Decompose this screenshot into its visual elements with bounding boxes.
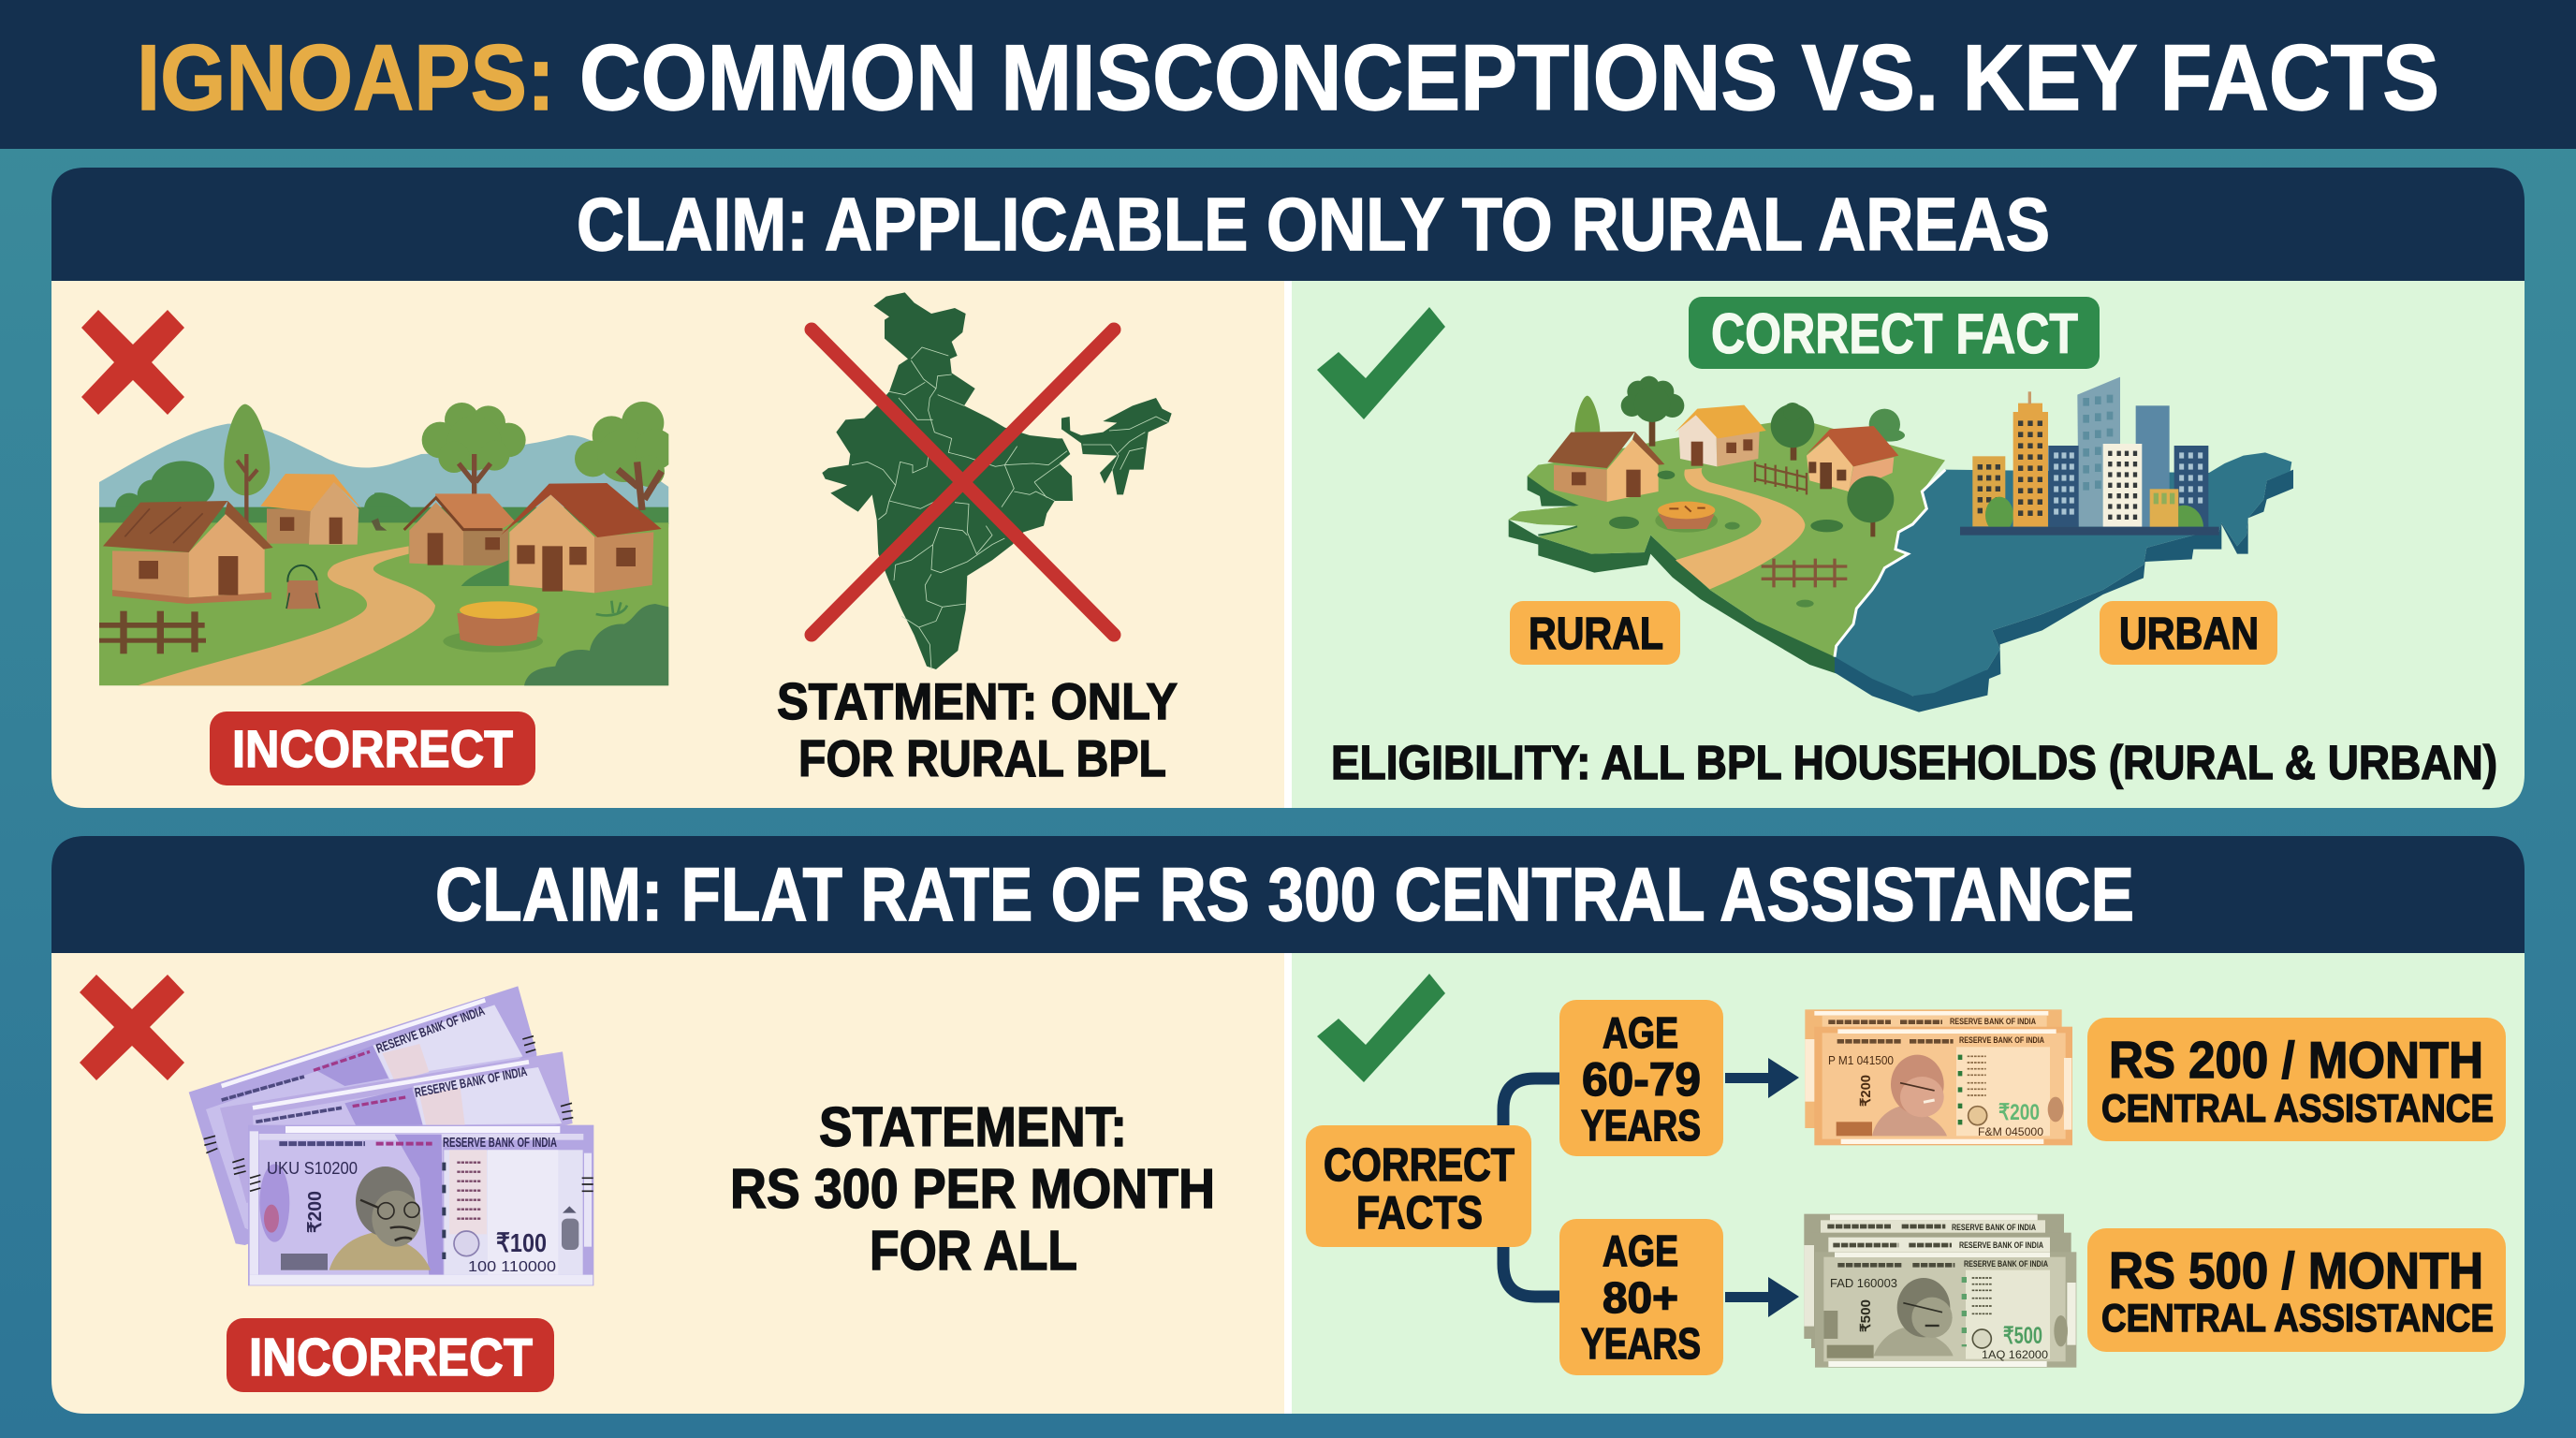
red cross over map [812, 330, 1114, 635]
urban land side [1835, 470, 2293, 712]
rs 500 callout: CENTRAL ASSISTANCE [2101, 1296, 2494, 1340]
icon: green check [1317, 307, 1445, 419]
rural label [1510, 601, 1680, 665]
illustration: purple banknotes: RESERVE BANK OF INDIA [374, 1003, 487, 1056]
road [138, 546, 435, 685]
illustration: grey 500 banknotes: ₹500 [2003, 1323, 2042, 1349]
grain basket [1655, 502, 1718, 533]
illustration: purple banknotes: ₹100 [496, 1228, 547, 1257]
back note [189, 986, 536, 1245]
icon: red cross [80, 975, 184, 1080]
statement 1 [777, 672, 1178, 787]
bucket [286, 565, 320, 609]
right side of the village [404, 402, 676, 685]
left house [1547, 432, 1664, 502]
urban label [2100, 601, 2277, 665]
correct facts box: CORRECT [1324, 1140, 1515, 1191]
rural land side [1509, 476, 1837, 674]
illustration: grey 500 banknotes: 1AQ 162000 [1982, 1348, 2048, 1361]
gandhi portrait [329, 1167, 431, 1270]
fact side background [1292, 953, 2525, 1414]
bushes [524, 604, 668, 685]
urban half [1835, 377, 2293, 712]
arrow: age 80+ to note [1725, 1277, 1799, 1317]
arrow: age 60-79 to note [1725, 1058, 1799, 1098]
white divide [1835, 470, 1945, 657]
illustration: orange 200 banknotes: F&M 045000 [1978, 1125, 2043, 1138]
round tree [422, 403, 526, 496]
illustration: grey 500 banknotes: RESERVE BANK OF INDIA [1964, 1259, 2048, 1269]
correct facts box: FACTS [1356, 1188, 1483, 1239]
illustration: rural and urban map [1509, 376, 2293, 712]
icon: india map crossed out [812, 292, 1172, 669]
statement 2: STATEMENT: [819, 1096, 1127, 1158]
middle note [220, 1051, 573, 1203]
lower fence [1762, 559, 1847, 587]
back tree [1621, 376, 1684, 447]
shrubs [1609, 471, 1843, 608]
left house [103, 501, 273, 604]
rs 200 callout [2087, 1018, 2506, 1141]
fact side background [1292, 281, 2525, 808]
age 60-79 box: 60-79 [1582, 1053, 1701, 1106]
title banner [0, 0, 2576, 149]
statement 2: FOR ALL [870, 1220, 1077, 1282]
illustration: grey 500 banknotes: RESERVE BANK OF INDIA [1959, 1240, 2043, 1250]
age 60-79 box [1559, 1000, 1723, 1156]
cream house [1675, 405, 1766, 466]
age 60-79 box: AGE [1603, 1008, 1678, 1057]
claim 2 heading [51, 836, 2525, 953]
age 80+ box [1559, 1219, 1723, 1375]
rs 200 callout: CENTRAL ASSISTANCE [2101, 1086, 2494, 1130]
rural label: RURAL [1529, 609, 1663, 659]
fence [1755, 462, 1807, 494]
top right shrub [1869, 409, 1905, 442]
fence [99, 611, 206, 653]
rural land [1509, 418, 1945, 657]
title banner: COMMON MISCONCEPTIONS VS. KEY FACTS [579, 25, 2439, 129]
back house [260, 474, 362, 545]
illustration: orange 200 banknotes: ₹200 [1858, 1075, 1874, 1107]
statement 2 [730, 1096, 1215, 1282]
shrub [461, 560, 508, 586]
illustration: orange 200 banknotes: RESERVE BANK OF INDIA [1959, 1035, 2044, 1045]
age 80+ box: 80+ [1603, 1273, 1678, 1322]
illustration: purple banknotes: ₹200 [305, 1191, 326, 1233]
panel: claim 1 rural areas [51, 168, 2525, 808]
rs 500 callout: RS 500 / MONTH [2109, 1241, 2483, 1299]
grain basket [443, 601, 543, 653]
illustration: grey 500 banknotes: FAD 160003 [1830, 1276, 1897, 1290]
claim 1 heading [51, 168, 2525, 281]
statement 1: STATMENT: ONLY [777, 672, 1178, 730]
incorrect badge 2: INCORRECT [249, 1328, 533, 1387]
seal and emblem [454, 1231, 479, 1256]
bird [372, 518, 387, 531]
arrow connectors from correct facts [1503, 1078, 1561, 1297]
india map [822, 292, 1172, 669]
age 80+ box: AGE [1603, 1226, 1678, 1275]
illustration: grey 500 banknotes: ₹500 [1858, 1299, 1874, 1332]
illustration: rural village [99, 402, 676, 685]
front note [248, 1125, 593, 1285]
middle tree [1771, 403, 1814, 461]
icon: red cross [81, 310, 184, 415]
illustration: grey 500 banknotes [1804, 1214, 2076, 1368]
city buildings [1960, 377, 2219, 536]
west coast lobe [1509, 506, 1598, 526]
age 80+ box: YEARS [1581, 1319, 1701, 1368]
middle house [404, 493, 515, 565]
correct fact badge: CORRECT FACT [1711, 302, 2078, 365]
illustration: orange 200 banknotes: ₹200 [1998, 1100, 2040, 1125]
urban label: URBAN [2119, 609, 2259, 659]
rs 500 callout [2087, 1228, 2506, 1352]
claim 2 heading: CLAIM: FLAT RATE OF RS 300 CENTRAL ASSISTANCE [435, 853, 2134, 937]
illustration: purple banknotes [189, 986, 593, 1285]
left tall tree [1574, 396, 1600, 433]
incorrect badge 1: INCORRECT [232, 719, 513, 778]
statement 1: FOR RURAL BPL [798, 729, 1166, 787]
panel: claim 2 flat rate [51, 836, 2525, 1414]
right house [501, 483, 662, 593]
claim 1 heading: CLAIM: APPLICABLE ONLY TO RURAL AREAS [577, 183, 2050, 266]
illustration: purple banknotes: 100 110000 [468, 1259, 556, 1275]
illustration: orange 200 banknotes [1805, 1009, 2072, 1145]
gandhi portrait [1872, 1055, 1947, 1136]
illustration: purple banknotes: UKU S10200 [267, 1159, 358, 1178]
gandhi portrait [1874, 1278, 1954, 1356]
slit in the coast [1538, 526, 1577, 536]
misconception side background [51, 281, 1284, 808]
title banner: IGNOAPS: [137, 25, 555, 129]
rs 200 callout: RS 200 / MONTH [2109, 1031, 2483, 1089]
tall tree [224, 404, 270, 524]
illustration: orange 200 banknotes: P M1 041500 [1828, 1053, 1894, 1067]
dirt path [1676, 468, 1805, 589]
statement 2: RS 300 PER MONTH [730, 1158, 1215, 1220]
icon: green check [1317, 974, 1445, 1082]
illustration: purple banknotes: RESERVE BANK OF INDIA [443, 1135, 557, 1151]
correct facts box [1306, 1125, 1531, 1247]
misconception side background [51, 953, 1284, 1414]
age 60-79 box: YEARS [1581, 1101, 1701, 1150]
illustration: orange 200 banknotes: RESERVE BANK OF INDIA [1950, 1017, 2036, 1026]
red roof house [1807, 426, 1898, 492]
illustration: purple banknotes: RESERVE BANK OF INDIA [414, 1064, 528, 1100]
far right tree [575, 402, 676, 510]
illustration: grey 500 banknotes: RESERVE BANK OF INDIA [1952, 1223, 2036, 1232]
urban land [1835, 452, 2291, 696]
grass [596, 601, 627, 615]
front tree [1847, 476, 1894, 536]
